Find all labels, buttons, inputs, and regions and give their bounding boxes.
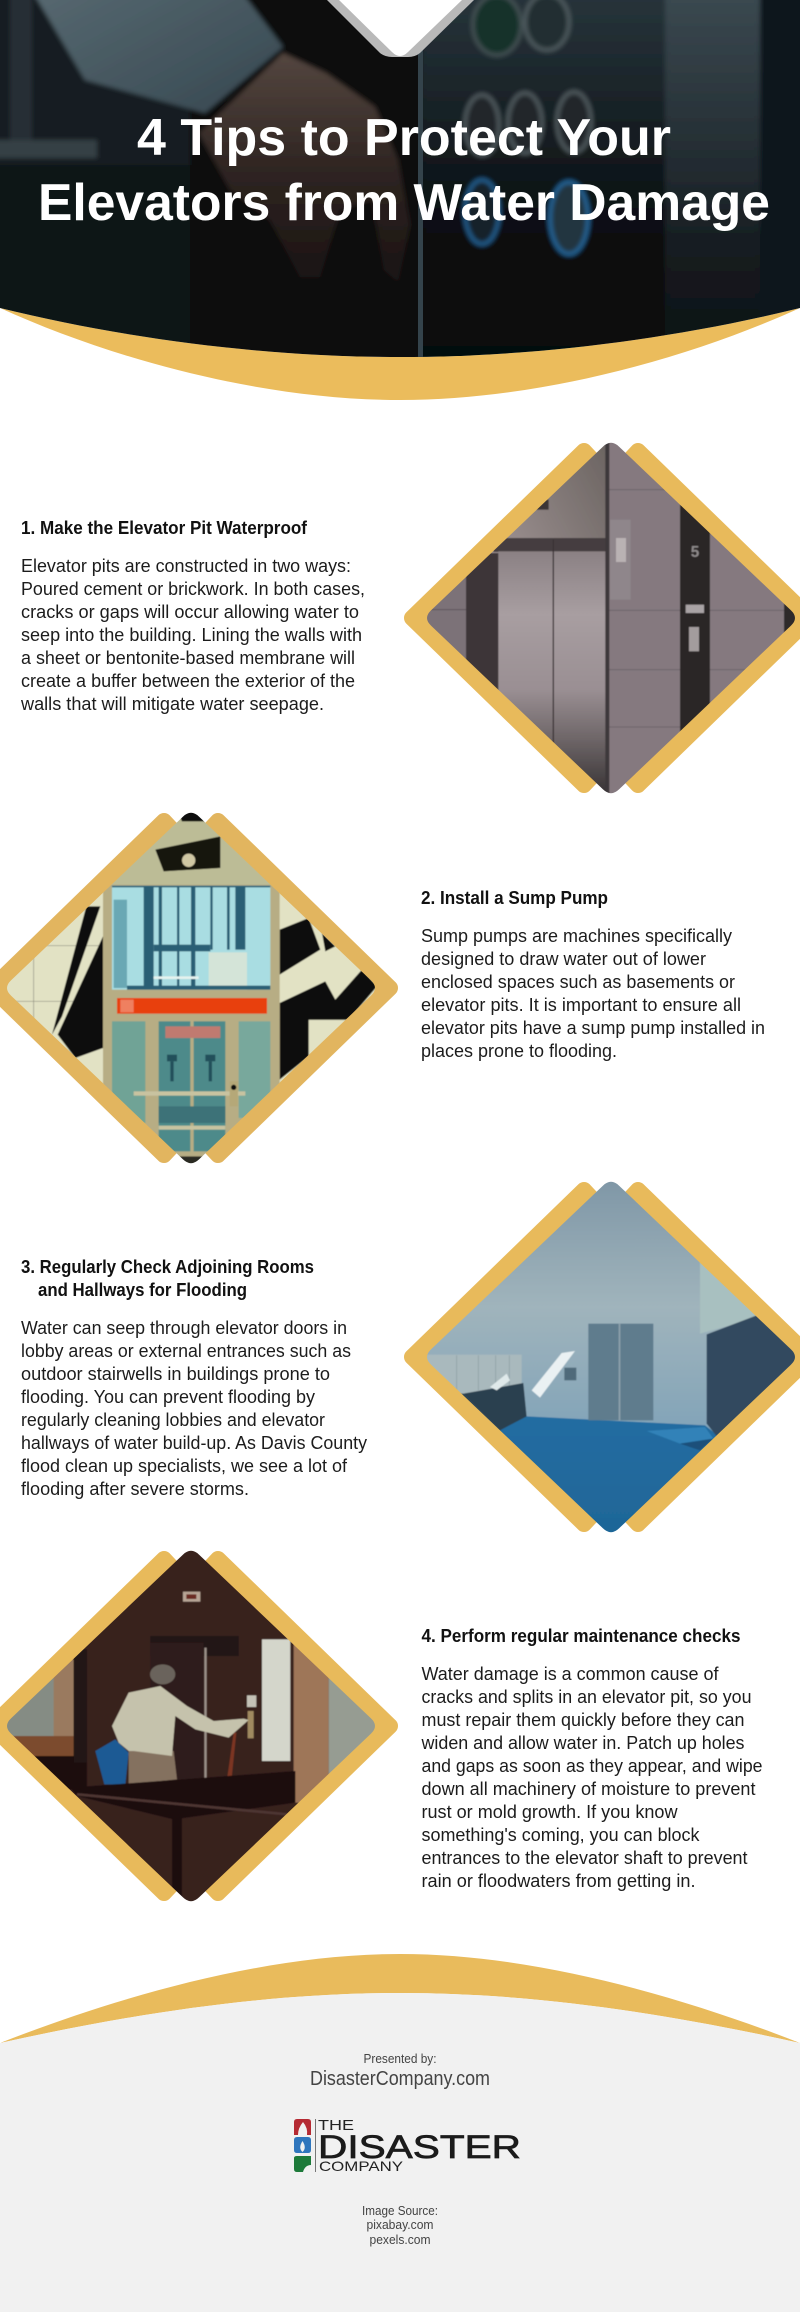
section 2 body: Sump pumps are machines specifically xyxy=(421,926,732,946)
section 4 body: Water damage is a common cause of xyxy=(422,1664,719,1684)
footer xyxy=(0,1954,800,2312)
title: 4 Tips to Protect Your xyxy=(137,109,671,167)
section 3 body: Water can seep through elevator doors in xyxy=(21,1318,347,1338)
image sources: pixabay.com xyxy=(366,2218,434,2232)
title xyxy=(38,109,770,232)
section 3 text xyxy=(21,1257,367,1499)
section 3 body: flood clean up specialists, we see a lot of xyxy=(21,1456,348,1476)
section 2 body xyxy=(421,926,765,1061)
section 1 body: Poured cement or brickwork. In both cases, xyxy=(21,579,365,599)
section 4 body: cracks and splits in an elevator pit, so you xyxy=(422,1687,752,1707)
top diamond notch xyxy=(327,0,474,57)
header photo: hand pressing elevator buttons xyxy=(0,0,800,390)
icon: water drop highlight xyxy=(300,2141,305,2152)
logo words xyxy=(318,2117,521,2174)
section 1 heading: 1. Make the Elevator Pit Waterproof xyxy=(21,518,308,538)
title: Elevators from Water Damage xyxy=(38,174,770,232)
section 4 body: rust or mold growth. If you know xyxy=(422,1802,678,1822)
section 3 body: regularly cleaning lobbies and elevator xyxy=(21,1410,325,1430)
section 4 heading: 4. Perform regular maintenance checks xyxy=(422,1626,740,1646)
section 3 body: outdoor stairwells in buildings prone to xyxy=(21,1364,330,1384)
section 4 text xyxy=(421,1626,762,1891)
image sources xyxy=(362,2204,438,2247)
section 1 text xyxy=(20,518,365,714)
diamond photo 3: blue lobby xyxy=(412,1170,800,1547)
section 4 body: rain or floodwaters from getting in. xyxy=(422,1871,696,1891)
gold header curve xyxy=(0,308,800,400)
image sources: pexels.com xyxy=(370,2233,430,2247)
section 3 body: hallways of water build-up. As Davis County xyxy=(21,1433,367,1453)
icon: water drop xyxy=(294,2137,311,2153)
section 3 heading xyxy=(21,1257,314,1300)
section 2 body: places prone to flooding. xyxy=(421,1041,617,1061)
section 2 heading: 2. Install a Sump Pump xyxy=(421,888,608,908)
footer panel xyxy=(0,1993,800,2312)
section 1 body: create a buffer between the exterior of the xyxy=(21,671,355,691)
section 3 body xyxy=(21,1318,367,1499)
section 2 text xyxy=(421,888,765,1061)
diamond photo 4: man pressing elevator button xyxy=(0,1539,407,1916)
section 4 body xyxy=(421,1664,762,1891)
section 2 body: elevator pits have a sump pump installed in xyxy=(421,1018,765,1038)
icon: mold xyxy=(294,2156,311,2172)
section 3 heading: and Hallways for Flooding xyxy=(38,1280,247,1300)
section 1 body: cracks or gaps will occur allowing water to xyxy=(21,602,359,622)
section 4 body: must repair them quickly before they can xyxy=(422,1710,744,1730)
section 1 body xyxy=(20,556,365,714)
website: DisasterCompany.com xyxy=(310,2068,490,2090)
section 4 body: widen and allow water in. Patch up holes xyxy=(421,1733,744,1753)
logo words: DISASTER xyxy=(318,2129,521,2165)
company logo xyxy=(294,2117,521,2174)
section 3 body: flooding after severe storms. xyxy=(21,1479,249,1499)
section 1 body: a sheet or bentonite-based membrane will xyxy=(21,648,355,668)
section 4 body: something's coming, you can block xyxy=(422,1825,700,1845)
diamond photo 2: glass elevator xyxy=(0,800,407,1176)
section 4 body: entrances to the elevator shaft to prevent xyxy=(422,1848,748,1868)
image sources: Image Source: xyxy=(362,2204,438,2218)
section 2 body: elevator pits. It is important to ensure all xyxy=(421,995,741,1015)
logo divider xyxy=(315,2119,316,2172)
section 3 heading: 3. Regularly Check Adjoining Rooms xyxy=(21,1257,314,1277)
diamond photo 1: stainless elevator doors xyxy=(412,433,800,803)
section 1 body: Elevator pits are constructed in two ways: xyxy=(21,556,351,576)
section 4 body: down all machinery of moisture to prevent xyxy=(422,1779,756,1799)
logo words: THE xyxy=(318,2117,354,2134)
section 1 body: seep into the building. Lining the walls with xyxy=(21,625,362,645)
section 4 body: and gaps as soon as they appear, and wipe xyxy=(422,1756,762,1776)
presented by: Presented by: xyxy=(364,2051,436,2066)
section 3 body: flooding. You can prevent flooding by xyxy=(21,1387,315,1407)
icon: flame xyxy=(294,2119,311,2135)
gold footer arc xyxy=(0,1954,800,2043)
section 2 body: enclosed spaces such as basements or xyxy=(421,972,735,992)
section 2 body: designed to draw water out of lower xyxy=(421,949,706,969)
section 1 body: walls that will mitigate water seepage. xyxy=(20,694,324,714)
section 3 body: lobby areas or external entrances such as xyxy=(21,1341,351,1361)
header banner xyxy=(0,0,800,400)
logo words: COMPANY xyxy=(319,2158,404,2174)
diamond photo 1: stainless elevator doors: 5 xyxy=(691,544,700,561)
